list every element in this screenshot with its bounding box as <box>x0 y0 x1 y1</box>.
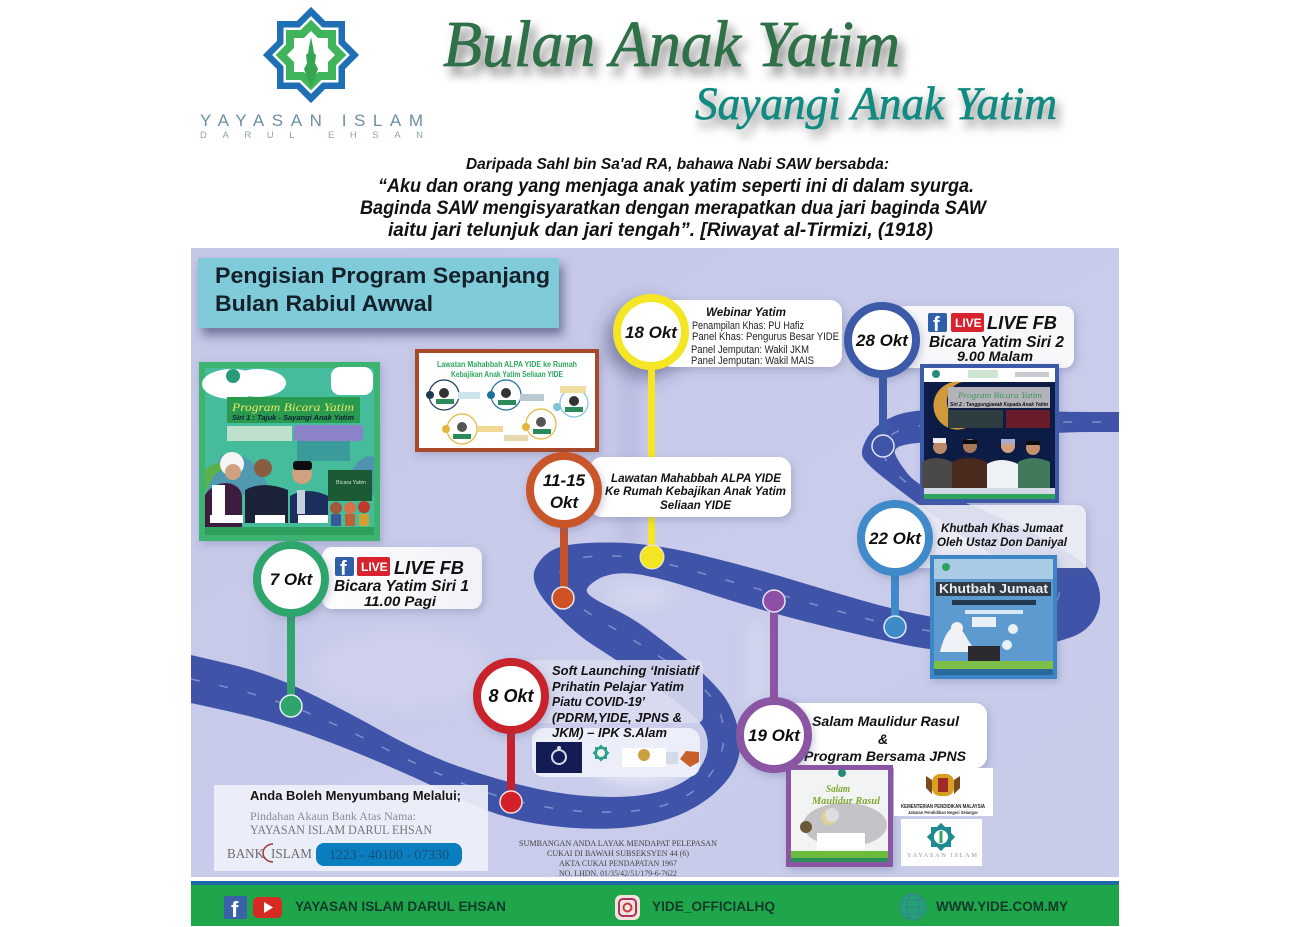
tax relief notice: NO. LHDN. 01/35/42/51/179-6-7622 <box>559 868 677 878</box>
hadith quotation: Baginda SAW mengisyaratkan dengan merapatkan dua jari baginda SAW <box>360 198 988 219</box>
label: Soft Launching: Piatu COVID-19’ <box>552 694 645 709</box>
connector: 18 Okt to road <box>648 365 655 557</box>
subtitle: Sayangi Anak Yatim: Sayangi Anak Yatim <box>695 78 1057 130</box>
label: Webinar Yatim: Webinar Yatim <box>706 307 786 319</box>
hadith quotation: “Aku dan orang yang menjaga anak yatim seperti ini di dalam syurga. <box>378 176 974 197</box>
poster: Salam Maulidur Rasul <box>786 765 893 867</box>
logo: Bank Islam: ISLAM <box>271 847 313 862</box>
poster: Salam Maulidur Rasul: Maulidur Rasul <box>811 795 881 807</box>
logo: Kementerian Pendidikan Malaysia: KEMENTERIAN PENDIDIKAN MALAYSIA <box>901 804 985 810</box>
road node: 18 Okt <box>640 545 664 569</box>
label: Khutbah Khas Jumaat: Oleh Ustaz Don Daniyal <box>937 535 1068 549</box>
event: 22 Okt <box>861 504 1086 679</box>
label: Lawatan Mahabbah: Lawatan Mahabbah ALPA YIDE <box>611 471 782 485</box>
date badge: 11-15 Okt: Okt <box>550 493 580 512</box>
logo: Kementerian Pendidikan Malaysia <box>894 768 993 816</box>
label: Soft Launching: Prihatin Pelajar Yatim <box>552 679 684 694</box>
logo: Yayasan Islam Darul Ehsan: YAYASAN ISLAM <box>200 111 423 130</box>
label: Webinar Yatim <box>660 300 842 367</box>
label: Khutbah Khas Jumaat <box>905 505 1086 568</box>
date badge: 11-15 Okt <box>530 456 598 524</box>
event: 8 Okt <box>477 660 703 813</box>
connector: 22 Okt to road <box>891 575 899 627</box>
poster: Program Bicara Yatim Siri 1 <box>199 362 380 541</box>
road node: 28 Okt <box>872 435 894 457</box>
date badge: 28 Okt: 28 Okt <box>855 331 909 350</box>
poster: Program Bicara Yatim Siri 1: Bicara Yatim <box>336 480 366 486</box>
event: 11-15 Okt <box>530 456 791 609</box>
label: Salam Maulidur Rasul: & <box>878 731 888 747</box>
connector: 28 Okt to road <box>879 375 887 445</box>
poster: Khutbah Jumaat: Khutbah Jumaat <box>939 581 1049 596</box>
bank account number: 1223 - 40100 - 07330 <box>329 848 449 863</box>
poster: Lawatan Mahabbah ALPA YIDE: Lawatan Mahabbah ALPA YIDE ke Rumah <box>437 360 577 369</box>
road node: 8 Okt <box>500 791 522 813</box>
icon: youtube <box>253 897 282 918</box>
poster: Salam Maulidur Rasul: Salam <box>826 783 850 795</box>
icon: instagram <box>615 895 640 920</box>
footer bar <box>191 881 1119 926</box>
road: winding timeline path <box>191 409 1119 829</box>
label: Bicara Yatim Siri 1: LIVE <box>361 560 388 574</box>
footer: website: WWW.YIDE.COM.MY <box>936 898 1069 914</box>
logo: Yayasan Islam small <box>901 819 982 866</box>
label: Bicara Yatim Siri 1: LIVE FB <box>394 558 464 578</box>
road node: 11-15 Okt <box>552 587 574 609</box>
date badge: 7 Okt: 7 Okt <box>270 570 314 589</box>
footer: instagram handle: YIDE_OFFICIALHQ <box>652 898 775 914</box>
logo: Bank Islam <box>227 844 313 862</box>
event: 19 Okt <box>740 590 993 867</box>
label: Bicara Yatim Siri 2 <box>895 306 1074 368</box>
bank account number <box>316 843 462 866</box>
road node: 19 Okt <box>763 590 785 612</box>
label: Lawatan Mahabbah: Ke Rumah Kebajikan Anak Yatim <box>605 484 786 498</box>
icon: facebook: f <box>231 897 239 922</box>
poster: Program Bicara Yatim Siri 2 <box>920 364 1059 503</box>
connector: 7 Okt to road <box>287 610 295 706</box>
date badge: 28 Okt <box>848 306 916 374</box>
date badge: 8 Okt: 8 Okt <box>488 686 535 706</box>
label: Bicara Yatim Siri 2: LIVE <box>955 316 982 330</box>
poster: Lawatan Mahabbah ALPA YIDE <box>415 349 599 452</box>
tax relief notice: SUMBANGAN ANDA LAYAK MENDAPAT PELEPASAN <box>519 838 717 848</box>
hadith quotation: iaitu jari telunjuk dan jari tengah”. [Riwayat al-Tirmizi, (1918) <box>388 220 933 241</box>
panel: section heading: Bulan Rabiul Awwal <box>215 291 433 316</box>
panel: section heading <box>198 258 559 328</box>
panel: donation details: Anda Boleh Menyumbang Melalui; <box>250 788 461 803</box>
date badge: 8 Okt <box>477 662 545 730</box>
label: Soft Launching: (PDRM,YIDE, JPNS & <box>552 710 682 725</box>
logo: Yayasan Islam small: YAYASAN ISLAM <box>907 852 977 859</box>
panel: donation details: Pindahan Akaun Bank Atas Nama: <box>250 811 416 823</box>
label: Bicara Yatim Siri 1: Bicara Yatim Siri 1 <box>334 578 469 595</box>
date badge: 22 Okt: 22 Okt <box>868 529 922 548</box>
panel: programme timeline background <box>191 248 1119 877</box>
logo: Yayasan Islam Darul Ehsan <box>200 7 423 141</box>
connector: 19 Okt to road <box>770 601 778 706</box>
hadith quotation: Daripada Sahl bin Sa'ad RA, bahawa Nabi SAW bersabda: <box>466 156 889 173</box>
label: Webinar Yatim: Penampilan Khas: PU Hafiz <box>692 320 804 332</box>
logo: Kementerian Pendidikan Malaysia: Jabatan Pendidikan Negeri Selangor <box>908 810 978 815</box>
connector: 8 Okt to road <box>507 730 515 801</box>
label: Bicara Yatim Siri 2: 9.00 Malam <box>957 349 1033 364</box>
label: Webinar Yatim: Panel Jemputan: Wakil MAIS <box>691 355 814 367</box>
date badge: 19 Okt: 19 Okt <box>748 726 801 745</box>
panel: section heading: Pengisian Program Sepanjang <box>215 263 550 288</box>
date badge: 7 Okt <box>257 545 325 613</box>
date badge: 18 Okt: 18 Okt <box>625 323 678 342</box>
logo: Yayasan Islam Darul Ehsan: DARUL EHSAN <box>200 130 423 141</box>
label: Soft Launching: Soft Launching ‘Inisiatif <box>552 663 701 678</box>
date badge: 11-15 Okt: 11-15 <box>543 471 586 490</box>
partner logos: PDRM, YIDE, KPM, JKM <box>536 742 699 773</box>
date badge: 18 Okt <box>617 298 685 366</box>
label: Bicara Yatim Siri 2: f <box>933 314 940 336</box>
label: Bicara Yatim Siri 2: Bicara Yatim Siri 2 <box>929 334 1064 351</box>
date badge: 19 Okt <box>740 701 808 769</box>
label: Salam Maulidur Rasul <box>770 703 987 768</box>
label: Soft Launching <box>530 660 703 777</box>
label: Bicara Yatim Siri 1 <box>322 547 482 609</box>
icon: facebook <box>224 896 247 922</box>
tax relief notice <box>519 838 717 878</box>
poster: Program Bicara Yatim Siri 1: Siri 1 : Tajuk - Sayangi Anak Yatim <box>232 415 354 422</box>
panel: donation details <box>214 785 488 871</box>
label: Bicara Yatim Siri 1: f <box>340 558 347 580</box>
hadith quotation <box>360 156 988 241</box>
poster: Khutbah Jumaat <box>930 555 1057 679</box>
road node: 7 Okt <box>280 695 302 717</box>
poster: Lawatan Mahabbah ALPA YIDE: Kebajikan Anak Yatim Seliaan YIDE <box>451 370 564 379</box>
poster: Program Bicara Yatim Siri 2: Siri 2 : Tanggungjawab Kepada Anak Yatim <box>950 402 1049 408</box>
footer: organisation name: YAYASAN ISLAM DARUL EHSAN <box>295 898 506 914</box>
connector: 11-15 Okt to road <box>560 525 568 598</box>
poster: Program Bicara Yatim Siri 1: Program Bicara Yatim <box>231 400 354 414</box>
event: 18 Okt <box>617 298 842 569</box>
label: Salam Maulidur Rasul: Salam Maulidur Rasul <box>812 713 960 729</box>
tax relief notice: AKTA CUKAI PENDAPATAN 1967 <box>559 858 677 868</box>
poster: Program Bicara Yatim Siri 2: Program Bicara Yatim <box>957 390 1042 400</box>
logo: Bank Islam: BANK <box>227 847 264 862</box>
panel: donation details: YAYASAN ISLAM DARUL EHSAN <box>250 823 432 837</box>
label: Bicara Yatim Siri 2: LIVE FB <box>987 313 1057 333</box>
label: Webinar Yatim: Panel Khas: Pengurus Besar YIDE <box>692 331 839 343</box>
event: 28 Okt <box>848 306 1074 503</box>
label: Salam Maulidur Rasul: Program Bersama JPNS <box>804 748 967 764</box>
icon: globe <box>900 894 926 920</box>
label: Bicara Yatim Siri 1: 11.00 Pagi <box>364 594 436 609</box>
label: Lawatan Mahabbah <box>590 457 791 517</box>
event: 7 Okt <box>257 545 482 717</box>
label: Soft Launching: JKM) – IPK S.Alam <box>552 725 667 740</box>
date badge: 22 Okt <box>861 504 929 572</box>
decorative soft shadows <box>273 302 761 784</box>
tax relief notice: CUKAI DI BAWAH SUBSEKSYEN 44 (6) <box>547 848 689 858</box>
label: Webinar Yatim: Panel Jemputan: Wakil JKM <box>691 344 809 356</box>
label: Lawatan Mahabbah: Seliaan YIDE <box>660 498 732 512</box>
road node: 22 Okt <box>884 616 906 638</box>
title: Bulan Anak Yatim: Bulan Anak Yatim <box>443 8 900 81</box>
label: Khutbah Khas Jumaat: Khutbah Khas Jumaat <box>941 521 1064 535</box>
